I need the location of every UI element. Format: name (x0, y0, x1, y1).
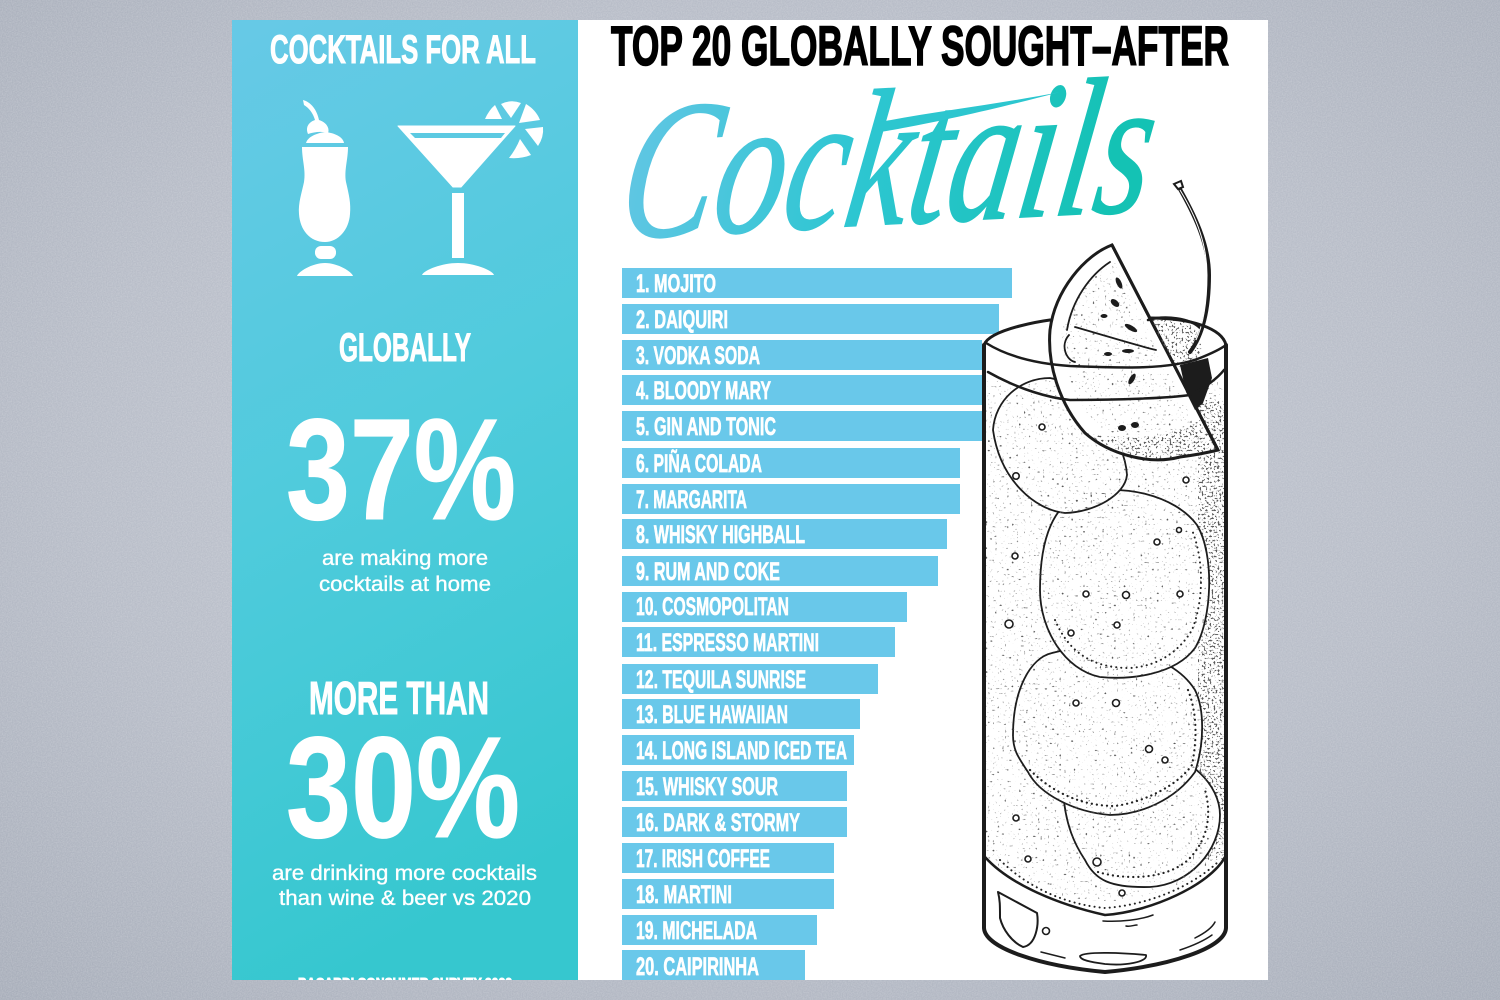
bar chart: top 20 cocktails: 11. ESPRESSO MARTINI (636, 629, 819, 657)
bar chart: top 20 cocktails: 13. BLUE HAWAIIAN (636, 701, 788, 729)
bar chart: top 20 cocktails: 17. IRISH COFFEE (636, 845, 770, 873)
script heading: cocktails: Cocktails (608, 35, 1172, 281)
caption: 30%: than wine & beer vs 2020 (279, 887, 531, 910)
caption: 30%: are drinking more cocktails (272, 862, 537, 885)
caption: 37%: are making more (322, 547, 488, 570)
white infographic sheet (578, 20, 1268, 980)
bar chart: top 20 cocktails: 5. GIN AND TONIC (636, 413, 776, 441)
glass body fill (983, 318, 1227, 973)
bar chart: top 20 cocktails: 19. MICHELADA (636, 917, 757, 945)
bubbles (1005, 424, 1189, 934)
caption: 37% (320, 549, 490, 592)
bar chart: top 20 cocktails (622, 268, 1012, 981)
caption: 30% (272, 864, 536, 906)
bar chart: top 20 cocktails: 2. DAIQUIRI (636, 306, 728, 334)
cherry and stem (1148, 181, 1212, 410)
bar chart: top 20 cocktails: 10. COSMOPOLITAN (636, 593, 789, 621)
source note: BACARDI CONSUMER SURVEY 2022 (298, 975, 512, 992)
bar chart: top 20 cocktails: 8. WHISKY HIGHBALL (636, 521, 805, 549)
panel: cocktails for all (232, 20, 578, 992)
bar chart: top 20 cocktails: 15. WHISKY SOUR (636, 773, 778, 801)
citrus wedge (1050, 245, 1218, 460)
caption: 37%: cocktails at home (319, 573, 491, 596)
illustration: highball glass with citrus and cherry (983, 181, 1227, 973)
icon: martini glass with citrus (398, 101, 543, 275)
heading: more than: MORE THAN (309, 672, 489, 724)
stat: 37%: 37% (286, 389, 516, 550)
citrus slices in the glass (993, 378, 1220, 887)
panel heading: COCKTAILS FOR ALL (270, 28, 536, 72)
heading: globally: GLOBALLY (339, 326, 471, 370)
bar chart: top 20 cocktails: 4. BLOODY MARY (636, 377, 771, 405)
stat: 30%: 30% (286, 707, 520, 868)
bar chart: top 20 cocktails: 6. PIÑA COLADA (636, 448, 762, 478)
liquid stipple (985, 375, 1225, 901)
icon: hurricane glass (297, 100, 353, 276)
bar chart: top 20 cocktails: 3. VODKA SODA (636, 342, 760, 370)
bar chart: top 20 cocktails: 12. TEQUILA SUNRISE (636, 666, 806, 694)
bar chart: top 20 cocktails: 7. MARGARITA (636, 486, 747, 514)
bar chart: top 20 cocktails: 9. RUM AND COKE (636, 558, 780, 586)
bar chart: top 20 cocktails: 18. MARTINI (636, 881, 732, 909)
bar chart: top 20 cocktails: 16. DARK & STORMY (636, 809, 800, 837)
bar chart: top 20 cocktails: 14. LONG ISLAND ICED TEA (636, 737, 847, 765)
bar chart: top 20 cocktails: 20. CAIPIRINHA (636, 953, 759, 981)
bar chart: top 20 cocktails: 1. MOJITO (636, 270, 716, 298)
slice texture (993, 378, 1220, 908)
glass outline (984, 318, 1226, 972)
